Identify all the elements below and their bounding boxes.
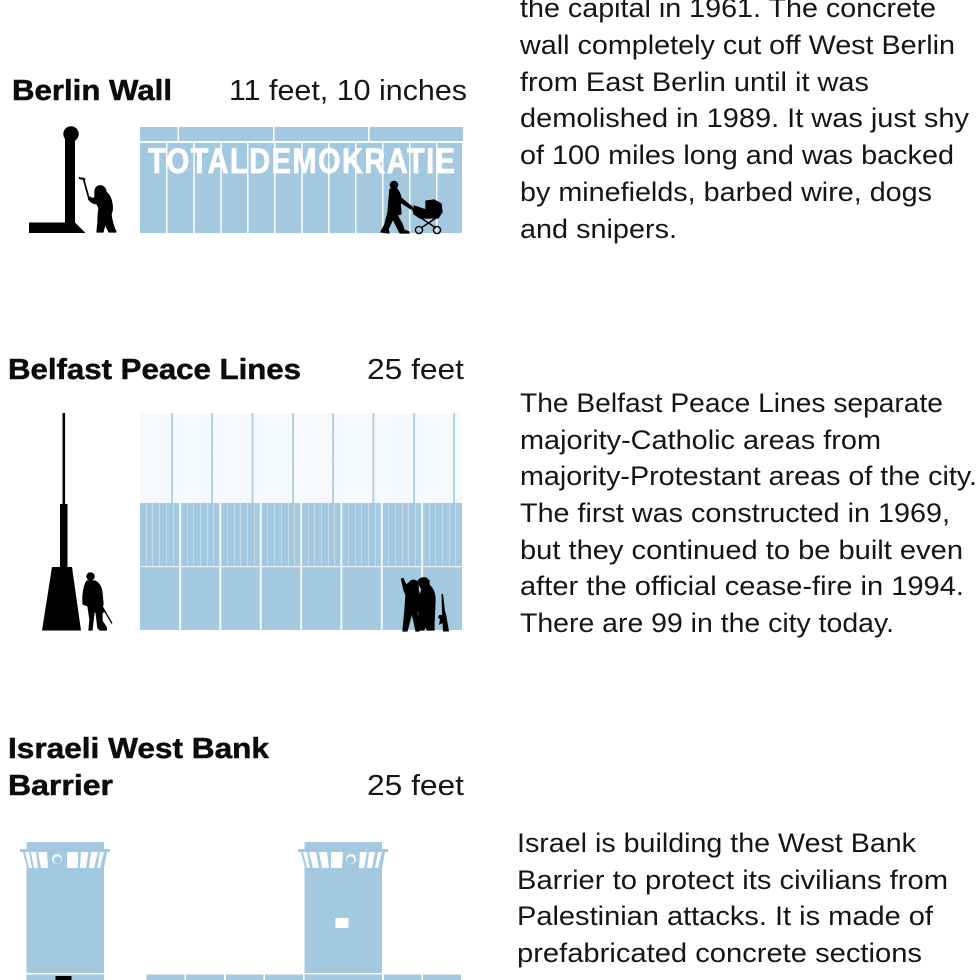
cross-section marker [56,976,72,980]
height label: Berlin Wall: 11 feet, 10 inches [229,75,467,107]
height label: Israel: 25 feet [367,770,464,802]
heading: Israeli West Bank Barrier [8,733,270,802]
icon: barrier cross-section [42,413,81,630]
icon: woman with pram [381,181,442,234]
icon: couple and rifle [402,578,449,632]
description: Israel: Barrier to protect its civilians from [517,865,948,895]
icon: soldier [83,572,112,630]
heading: Israeli West Bank Barrier: Barrier [8,770,113,802]
description: Berlin Wall: of 100 miles long and was backed [520,140,954,170]
watchtower: right [298,842,388,973]
height label: Belfast: 25 feet [367,354,464,386]
description: Berlin Wall: from East Berlin until it was [520,67,869,97]
heading: Berlin Wall: Berlin Wall [12,75,172,107]
description: Berlin Wall [519,0,970,244]
icon: lamp post cross-section [29,126,86,233]
description: Israel: Israel is building the West Bank [517,828,917,858]
graffiti text: TOTALDEMOKRATIE [148,141,455,181]
description: Belfast: majority-Catholic areas from [520,425,881,455]
panel: Israeli West Bank Barrier [8,733,948,980]
description: Israel [517,828,948,968]
description: Belfast: The first was constructed in 1969, [520,498,950,528]
icon: person with sledgehammer [79,177,116,232]
description: Israel: prefabricated concrete sections [517,938,922,968]
watchtower: left [20,842,110,980]
heading: Belfast Peace Lines: Belfast Peace Lines [8,354,301,386]
description: Berlin Wall: by minefields, barbed wire, dogs [520,177,932,207]
description: Belfast: after the official cease-fire in 1994. [520,571,964,601]
description: Belfast: majority-Protestant areas of the city. [520,461,977,491]
description: Belfast: There are 99 in the city today. [520,608,894,638]
wall elevation: Berlin Wall [140,127,463,233]
description: Belfast [520,388,977,638]
description: Berlin Wall: demolished in 1989. It was just shy [520,103,970,133]
description: Berlin Wall: wall completely cut off West Berlin [519,30,955,60]
description: Israel: Palestinian attacks. It is made of [517,901,934,931]
wall elevation: Israel [146,974,461,980]
description: Belfast: The Belfast Peace Lines separate [520,388,943,418]
description: Belfast: but they continued to be built even [520,535,963,565]
heading: Israeli West Bank Barrier: Israeli West Bank [8,733,270,765]
description: Berlin Wall: and snipers. [520,214,677,244]
panel: Berlin Wall [12,0,970,244]
wall elevation: Belfast [140,413,462,630]
panel: Belfast Peace Lines [8,354,977,638]
